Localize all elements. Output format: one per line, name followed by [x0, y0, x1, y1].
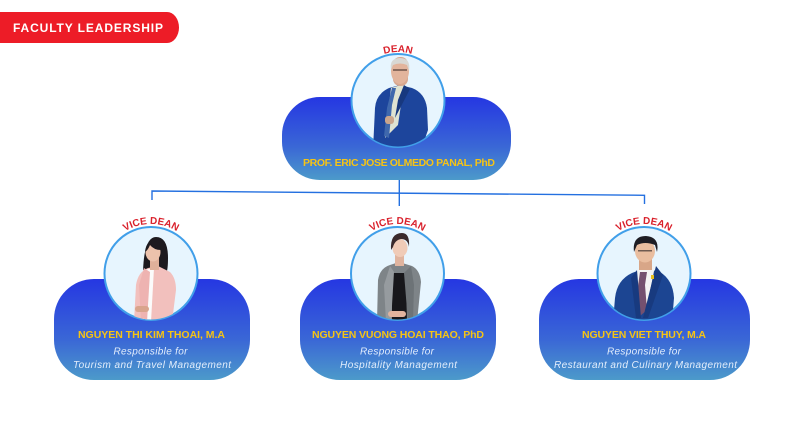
role label: vice dean 1: VICE DEAN — [122, 217, 180, 231]
banner: faculty leadership — [0, 12, 179, 43]
responsibility: vice dean 3: Restaurant and Culinary Management — [554, 360, 738, 371]
name: dean: PROF. ERIC JOSE OLMEDO PANAL, PhD — [303, 157, 495, 169]
name: vice dean 1: NGUYEN THI KIM THOAI, M.A — [78, 329, 225, 341]
responsibility: vice dean 1: Responsible for — [114, 346, 188, 358]
responsibility: vice dean 1 — [73, 346, 232, 371]
org chart connector lines — [152, 180, 644, 206]
panel: vice dean 1 — [54, 217, 250, 380]
role label: vice dean 3: VICE DEAN — [615, 217, 672, 231]
role label: vice dean 2: VICE DEAN — [368, 217, 426, 231]
responsibility: vice dean 2: Responsible for — [360, 346, 435, 358]
portrait: vice dean 2 — [351, 227, 444, 322]
responsibility: vice dean 2: Hospitality Management — [340, 360, 458, 371]
panel: vice dean 3 — [539, 217, 750, 380]
portrait: dean — [352, 54, 444, 150]
role label: dean: DEAN — [383, 45, 413, 54]
responsibility: vice dean 3: Responsible for — [607, 346, 682, 358]
banner: faculty leadership: FACULTY LEADERSHIP — [13, 21, 163, 35]
responsibility: vice dean 2 — [340, 346, 458, 371]
panel: dean — [282, 45, 511, 180]
portrait: vice dean 3 — [598, 227, 690, 322]
name: vice dean 3: NGUYEN VIET THUY, M.A — [582, 329, 706, 341]
responsibility: vice dean 3 — [554, 346, 738, 371]
name: vice dean 2: NGUYEN VUONG HOAI THAO, PhD — [312, 329, 484, 341]
panel: vice dean 2 — [300, 217, 496, 380]
responsibility: vice dean 1: Tourism and Travel Management — [73, 360, 232, 371]
portrait: vice dean 1 — [104, 227, 198, 322]
